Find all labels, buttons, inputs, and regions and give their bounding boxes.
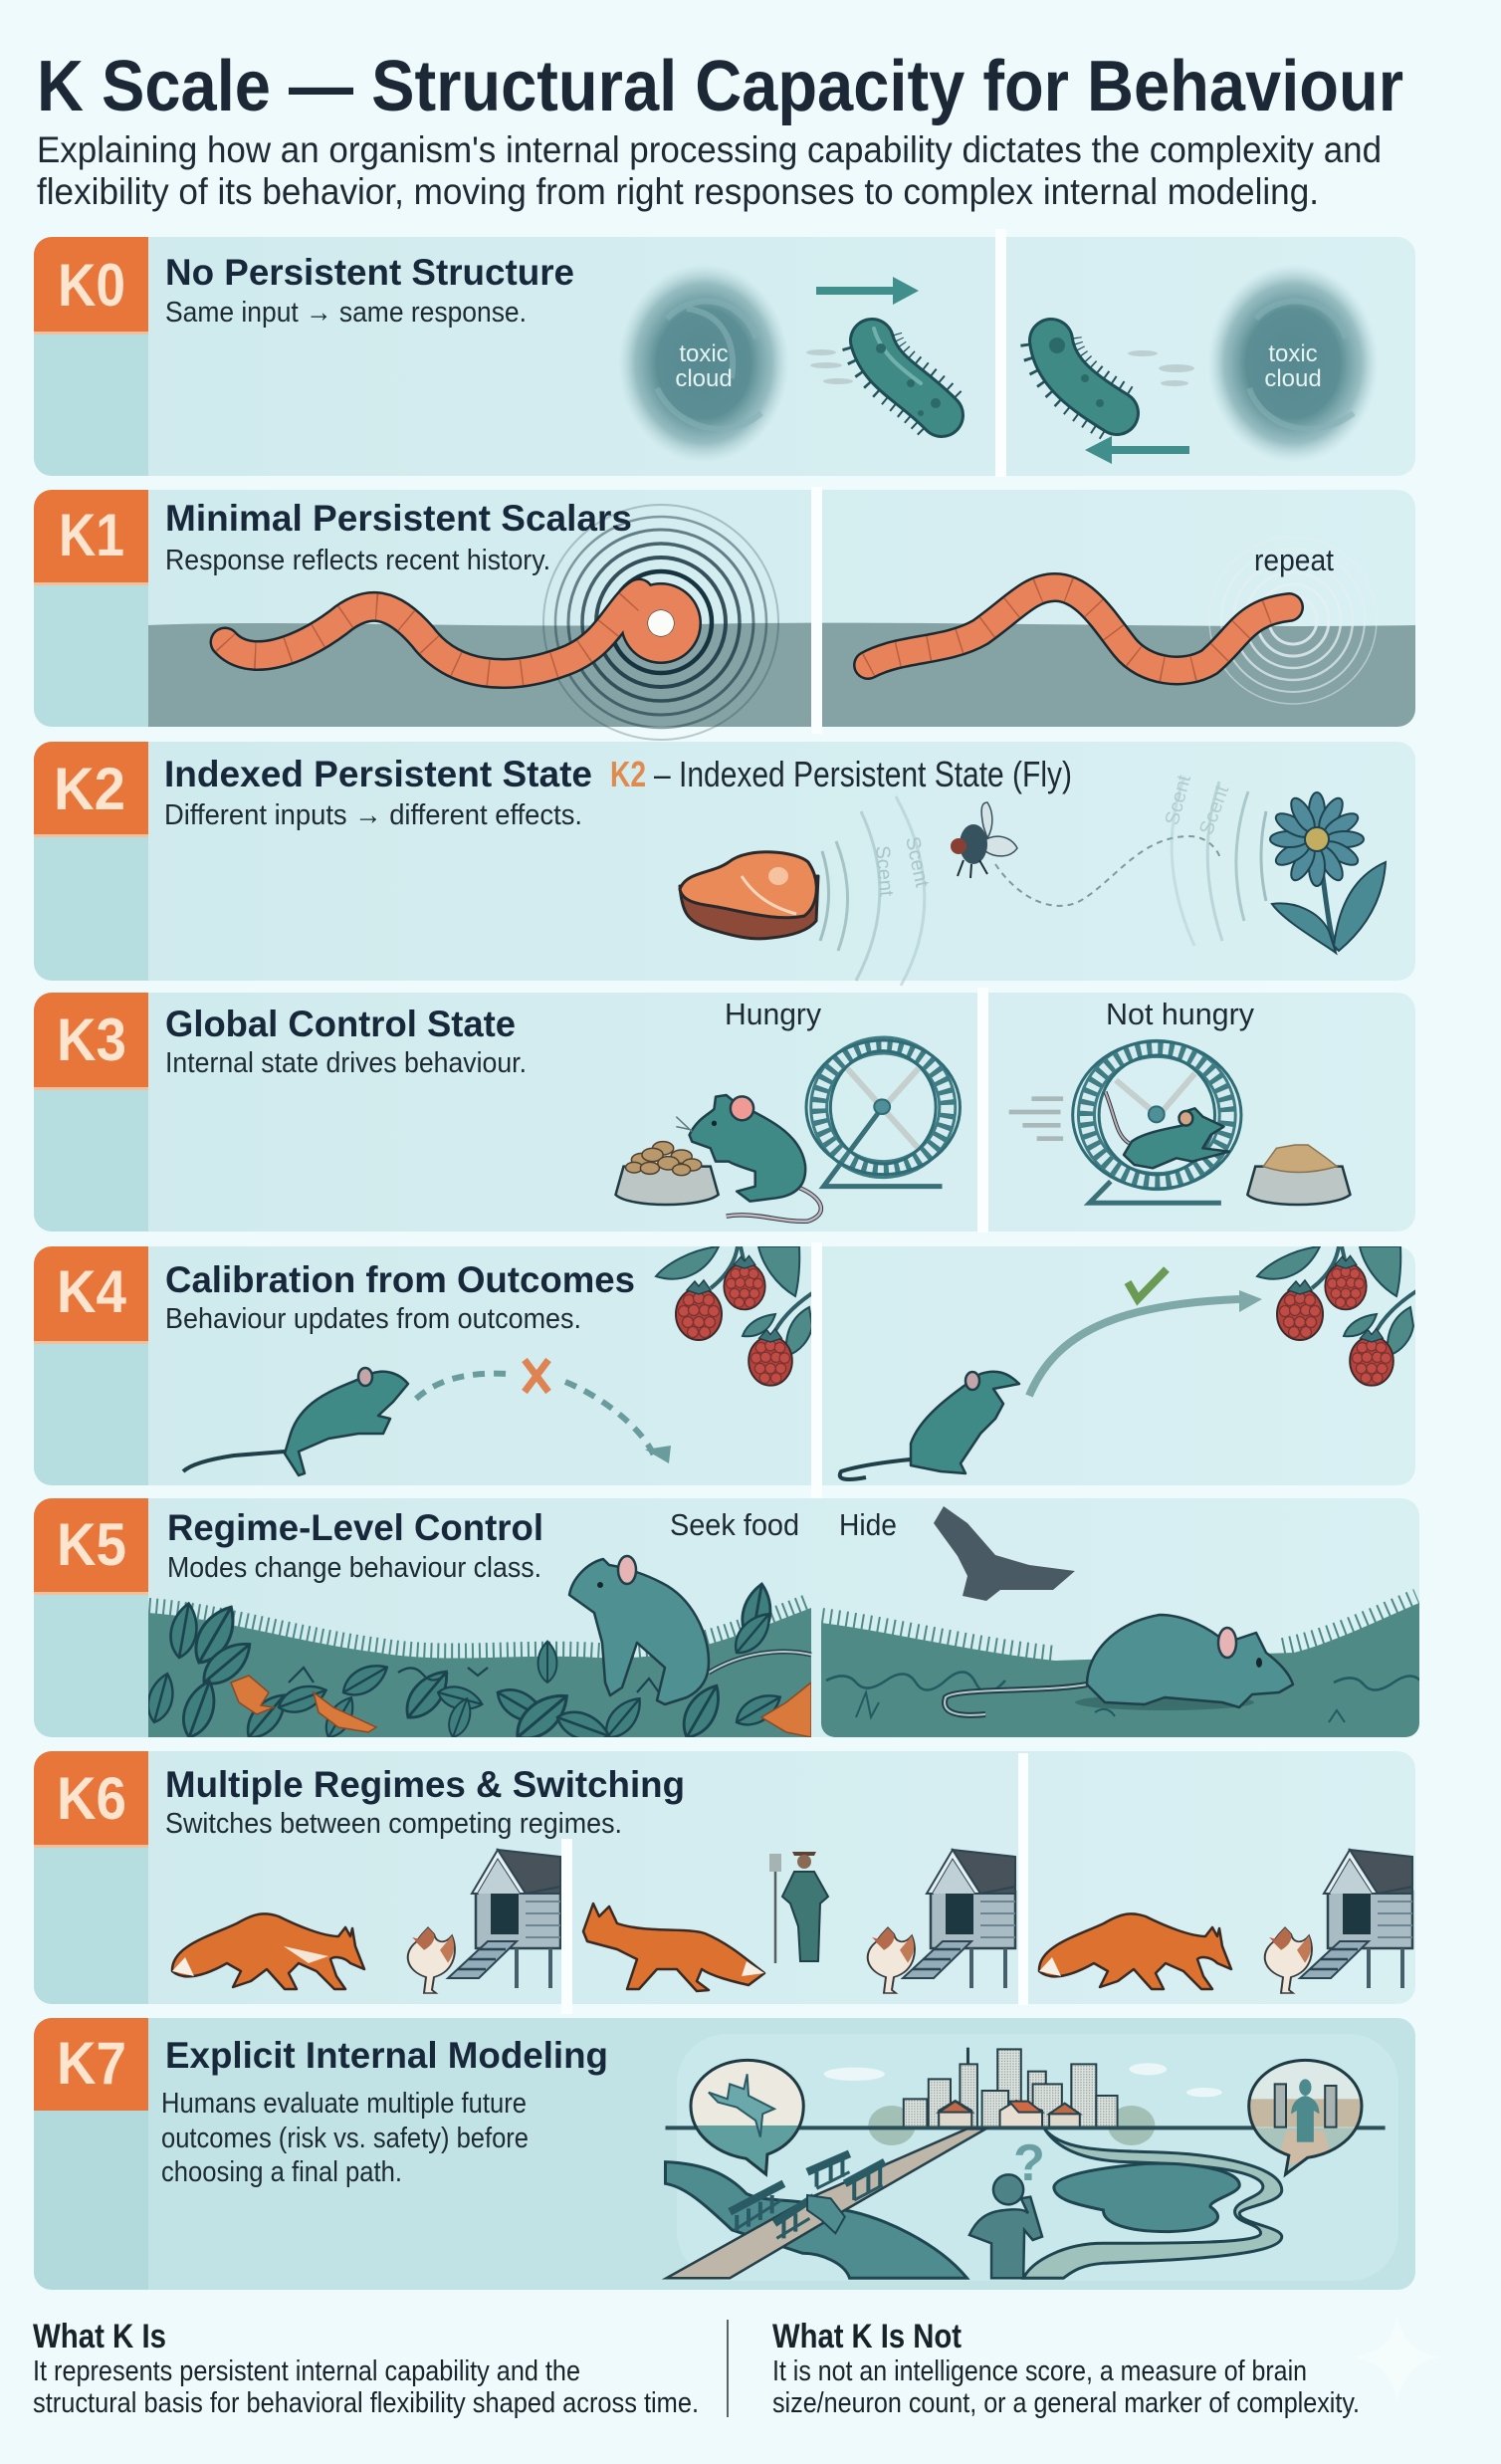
raspberries left [656, 1246, 815, 1386]
bird [934, 1506, 1075, 1601]
K2 secondary heading: – Indexed Persistent State (Fly) [654, 754, 1072, 794]
K1 description: Response reflects recent history. [165, 545, 550, 576]
label: scent left [871, 834, 933, 898]
straight road [666, 2128, 985, 2278]
ripple rings right [1209, 537, 1377, 704]
houses [939, 2101, 1080, 2128]
speech bubble: risk [685, 2060, 807, 2178]
broken bridge [730, 2153, 885, 2238]
footer: what K is: What K Is [33, 2318, 166, 2355]
pond [1054, 2163, 1239, 2232]
worm right [868, 587, 1289, 670]
clouds [824, 2063, 1222, 2097]
mouse running [1105, 1092, 1229, 1168]
K5 description: Modes change behaviour class. [167, 1552, 541, 1584]
K6 heading: Multiple Regimes & Switching [165, 1764, 685, 1805]
badge K6 [34, 1751, 148, 1848]
toxic cloud right: toxic [1268, 340, 1318, 367]
label: scent right [1162, 773, 1233, 838]
icon: fly [951, 802, 1017, 878]
scene: decision landscape [665, 2048, 1386, 2278]
dashed failed path [416, 1374, 655, 1458]
toxic cloud left: cloud [675, 365, 733, 392]
worm left [225, 593, 687, 673]
footer: what K is not: It is not an intelligence score, a measure of brain [772, 2355, 1307, 2387]
K0 heading: No Persistent Structure [165, 252, 574, 293]
label: not hungry: Not hungry [1106, 997, 1254, 1031]
footer: what K is not: size/neuron count, or a general marker of complexity. [772, 2387, 1360, 2419]
toxic cloud right: cloud [1264, 365, 1322, 392]
panel: K1 [34, 490, 1415, 740]
bacterium right [1049, 337, 1117, 413]
K7 description: Humans evaluate multiple future [161, 2088, 527, 2120]
label: scent left: Scent [901, 834, 933, 889]
footer: what K is not: What K Is Not [772, 2318, 962, 2355]
horizon line [665, 2126, 1386, 2129]
hiding ground [821, 1603, 1423, 1737]
panel: K7 [34, 2018, 1415, 2290]
K5 heading: Regime-Level Control [167, 1507, 543, 1548]
subtitle: Explaining how an organism's internal processing capability dictates the complexity and [37, 129, 1382, 170]
bowl with food left [616, 1142, 719, 1205]
panel: K4 [34, 1246, 1416, 1485]
K6 description: Switches between competing regimes. [165, 1808, 622, 1840]
X mark [525, 1360, 548, 1392]
footer: what K is: It represents persistent internal capability and the [33, 2355, 580, 2387]
toxic cloud left [618, 264, 789, 463]
icon: flower [1270, 792, 1386, 953]
K7 description [161, 2088, 529, 2188]
icon: sparkle [1354, 2316, 1439, 2401]
arrow right [816, 277, 919, 305]
check mark [1128, 1269, 1167, 1299]
badge K2: K2 [54, 756, 125, 822]
hamster wheel left [806, 1040, 960, 1187]
K7 heading: Explicit Internal Modeling [165, 2035, 608, 2076]
left river [665, 2162, 967, 2278]
panel: K0 [34, 237, 1415, 476]
winding path [1023, 2128, 1282, 2278]
mouse eating [676, 1095, 821, 1222]
K2 heading: Indexed Persistent State [164, 754, 592, 794]
label: scent right: Scent [1162, 773, 1195, 827]
badge K1: K1 [59, 502, 124, 568]
hills [868, 2106, 1155, 2145]
badge K7: K7 [57, 2030, 126, 2097]
K3 heading: Global Control State [165, 1004, 516, 1044]
hamster wheel right [1073, 1041, 1241, 1203]
footer: what K is not [772, 2318, 1360, 2419]
K7 description: choosing a final path. [161, 2156, 402, 2188]
K2 description: Different inputs → different effects. [164, 799, 582, 831]
badge K6: K6 [57, 1765, 126, 1832]
mouse seeking food [569, 1556, 811, 1704]
K3 description: Internal state drives behaviour. [165, 1047, 527, 1079]
motion wisps right [1128, 350, 1194, 386]
K1 heading: Minimal Persistent Scalars [165, 498, 632, 539]
K7 description: outcomes (risk vs. safety) before [161, 2123, 529, 2154]
bacterium left [872, 329, 942, 416]
footer: what K is [33, 2318, 699, 2419]
mouse jumping [183, 1368, 408, 1475]
raspberries right [1257, 1246, 1416, 1386]
panel: K5 [34, 1498, 1423, 1748]
badge K0: K0 [58, 252, 125, 319]
fox stalking [172, 1913, 364, 1989]
K2 secondary heading: K2 [610, 754, 646, 794]
badge K0 [34, 237, 148, 335]
K4 description: Behaviour updates from outcomes. [165, 1303, 581, 1335]
panel: K2 [34, 742, 1415, 986]
panel: K6 [34, 1751, 1415, 2004]
badge K3 [34, 993, 148, 1090]
speech bubble: safety [1246, 2060, 1364, 2177]
scent waves flower [1172, 777, 1266, 946]
thinking person [969, 2174, 1042, 2278]
scene 3: fox, chicken, coop [1039, 1850, 1412, 1993]
mouse standing [840, 1372, 1019, 1479]
badge K5: K5 [57, 1511, 126, 1578]
icon: meat [680, 852, 818, 939]
badge K4 [34, 1246, 148, 1344]
toxic cloud left: toxic [679, 340, 729, 367]
K4 heading: Calibration from Outcomes [165, 1259, 635, 1300]
label: seek food: Seek food [670, 1507, 799, 1542]
label: scent left: Scent [871, 845, 897, 898]
panel: K3 [34, 993, 1415, 1232]
motion wisps left [806, 349, 853, 384]
fox retreating [583, 1904, 764, 1991]
ripple rings left [543, 505, 778, 740]
label: scent right: Scent [1195, 783, 1233, 838]
toxic cloud right [1207, 264, 1379, 463]
scene 2: fox, farmer, chicken, coop [583, 1850, 1015, 1993]
badge K1 [34, 490, 148, 585]
mouse hiding [945, 1615, 1293, 1715]
dashed flight path [995, 836, 1220, 906]
bridge gap debris [807, 2195, 845, 2233]
question mark: ? [1013, 2134, 1045, 2192]
footer: what K is: structural basis for behavioral flexibility shaped across time. [33, 2387, 699, 2419]
foraging undergrowth [143, 1582, 811, 1748]
success arrow [1029, 1290, 1262, 1396]
farmer [769, 1852, 828, 1963]
label: hide: Hide [839, 1507, 897, 1542]
badge K5 [34, 1498, 148, 1595]
city skyline [904, 2048, 1118, 2128]
arrowhead failed [645, 1446, 671, 1463]
badge K7 [34, 2018, 148, 2111]
scene 1: fox, chicken, coop [172, 1850, 560, 1993]
K0 description: Same input → same response. [165, 297, 527, 329]
bowl with food right [1247, 1145, 1350, 1205]
label: repeat: repeat [1254, 543, 1334, 577]
badge K2 [34, 742, 148, 837]
subtitle: flexibility of its behavior, moving from right responses to complex internal modeling. [37, 171, 1319, 212]
scent waves meat [820, 796, 925, 986]
badge K4: K4 [57, 1258, 127, 1325]
arrow left [1085, 436, 1189, 464]
badge K3: K3 [57, 1007, 126, 1073]
subtitle [37, 129, 1382, 212]
label: hungry: Hungry [725, 997, 821, 1031]
speed lines [1009, 1096, 1063, 1141]
